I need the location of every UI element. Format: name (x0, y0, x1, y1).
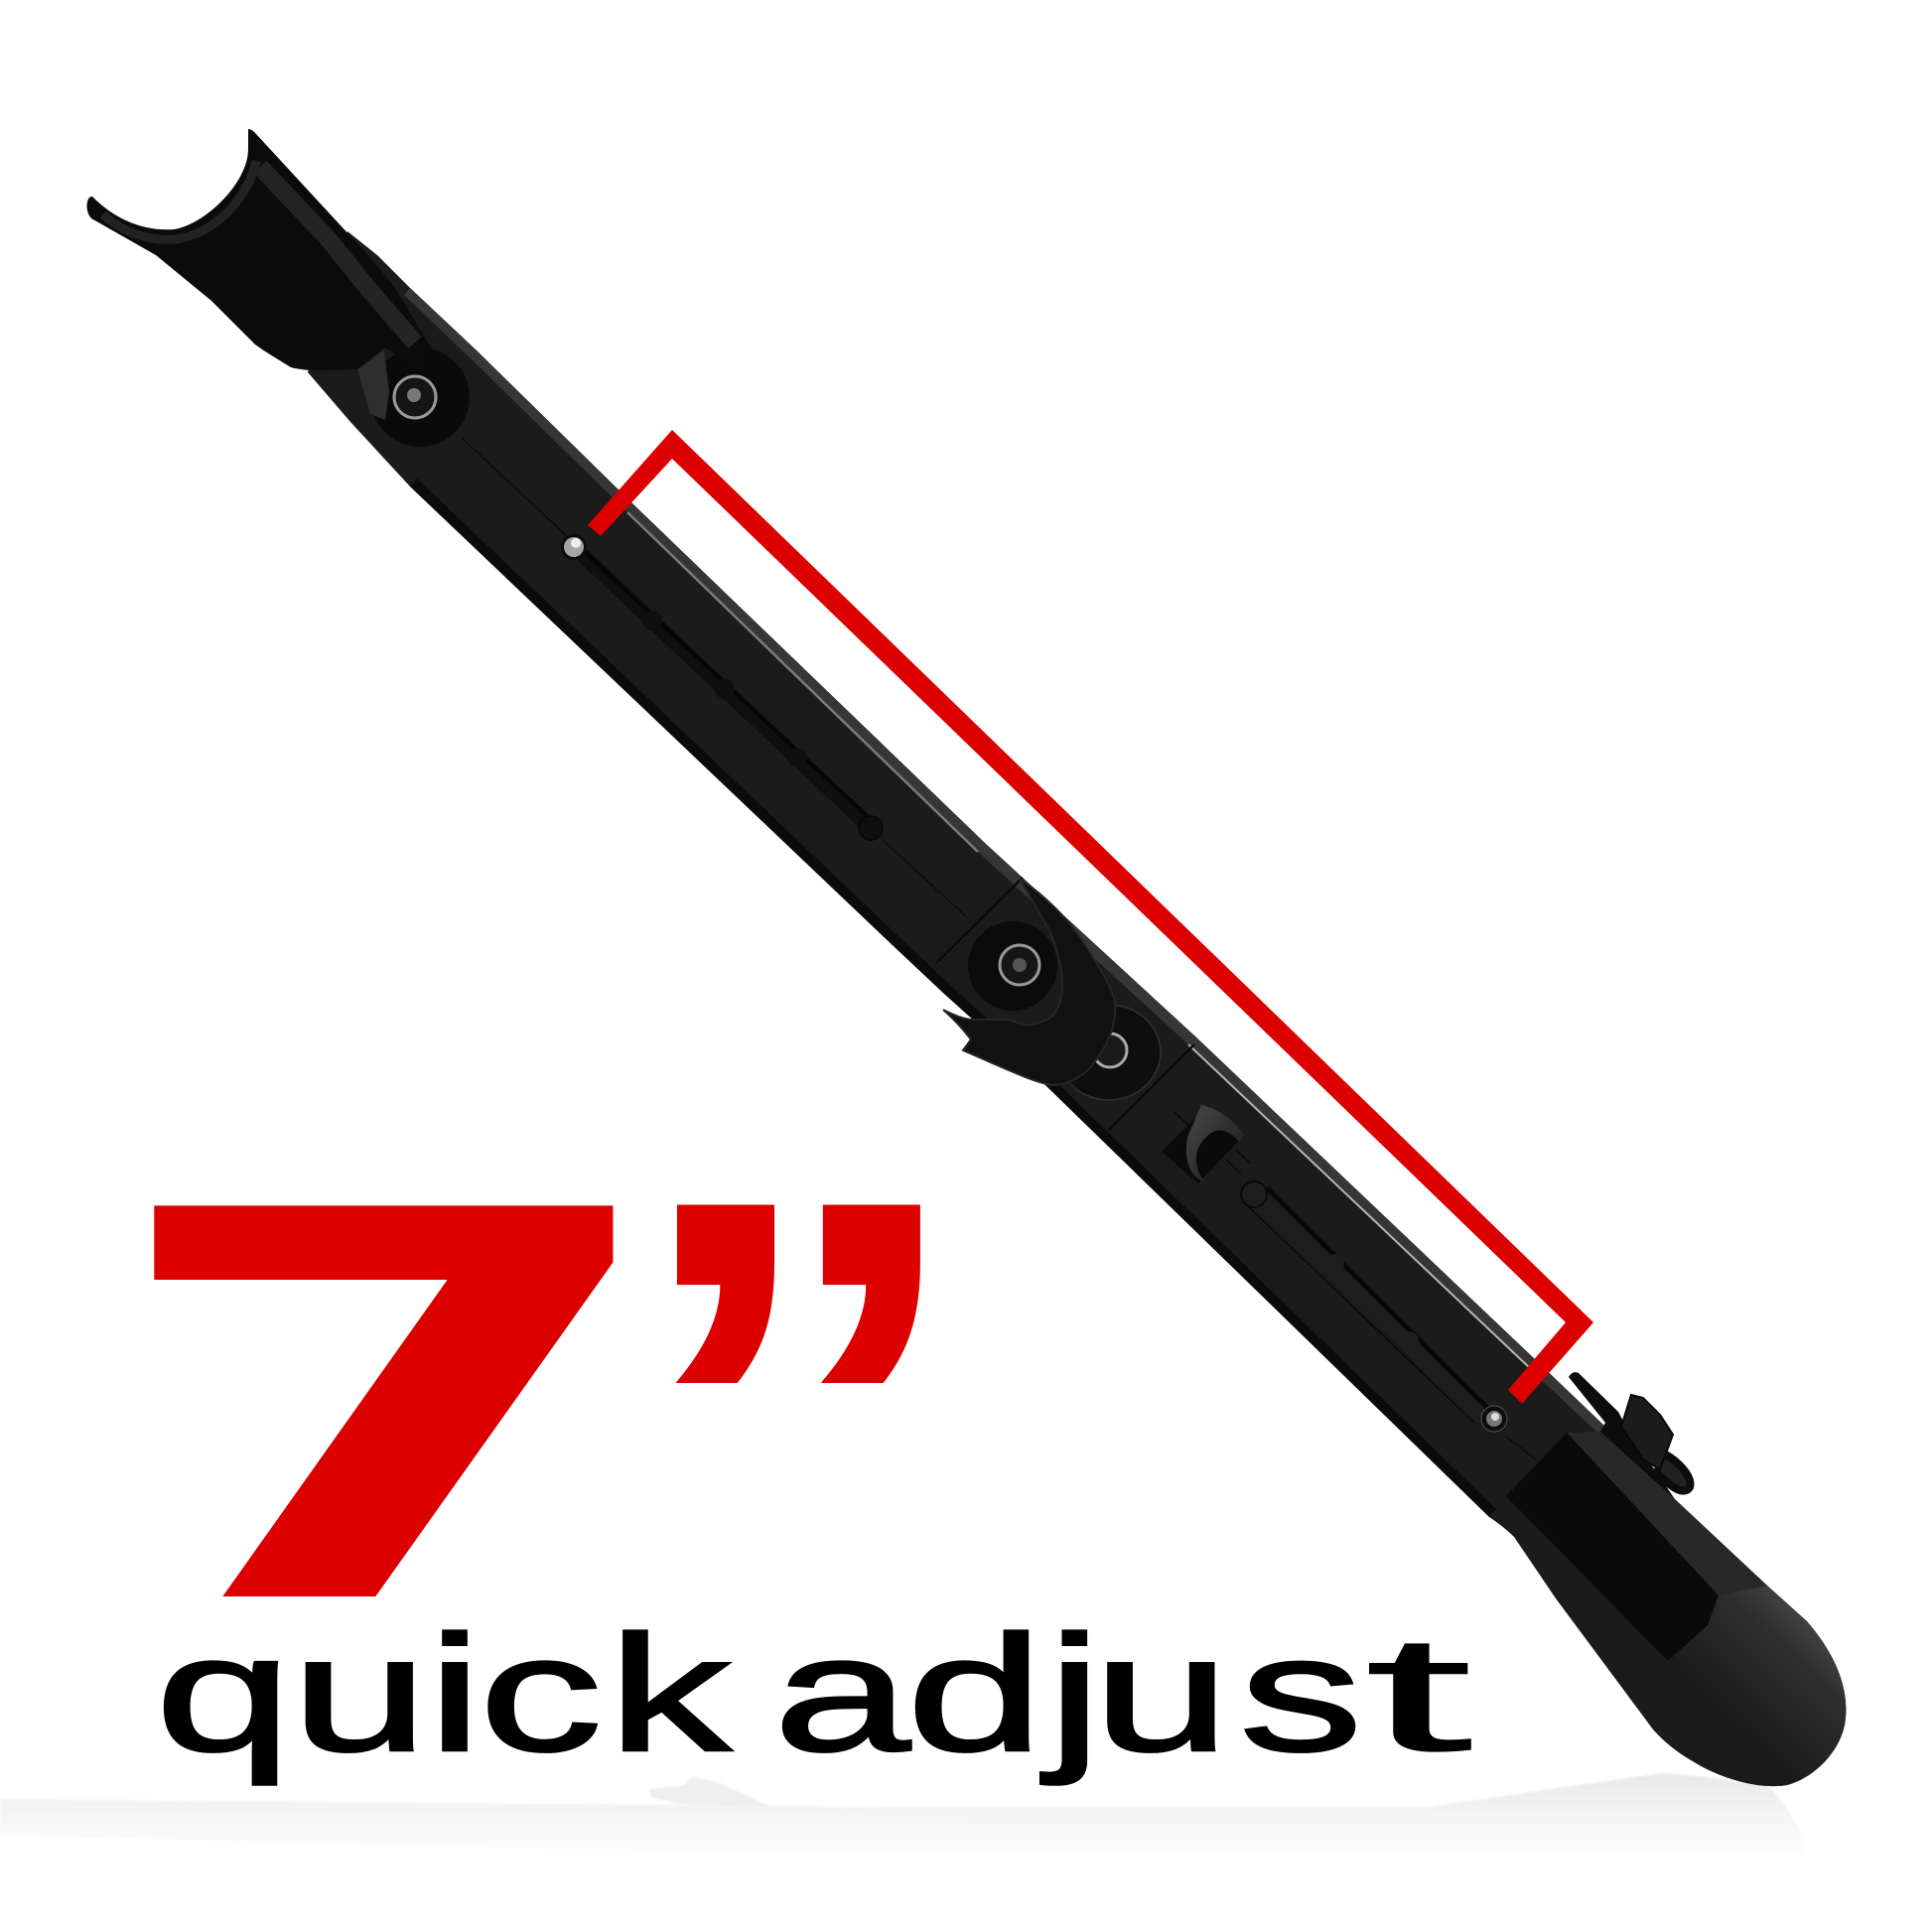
rail highlights (462, 438, 1536, 1459)
rod cup (87, 129, 432, 420)
centre folding rod clip (943, 879, 1115, 1085)
adjustment pin top (561, 534, 587, 560)
top pivot disc with screw (370, 347, 470, 447)
heading: 7 inch measurement: ” (624, 1067, 972, 1773)
rail and grip silhouette (308, 231, 1846, 1786)
small line clip (1162, 1105, 1251, 1183)
strap ring (1654, 1451, 1690, 1491)
centre pivot disc, lower (1057, 1005, 1161, 1100)
word: adjust: t (1364, 1600, 1473, 1785)
red dimension bracket (588, 430, 1593, 1404)
strap attachment bar (1569, 1372, 1675, 1499)
lower rail dark band (410, 479, 1496, 1517)
centre pivot disc, upper (968, 921, 1057, 1011)
gray bevel strip along top edge (404, 288, 1605, 1434)
grip end cap (1653, 1586, 1846, 1786)
grip dark panel (1506, 1433, 1719, 1661)
floor shadow (0, 1773, 1807, 1859)
upper adjustment slot (586, 553, 883, 840)
heading: 7 inch measurement (98, 1067, 972, 1773)
product: adjustable rod rail (87, 129, 1846, 1786)
adjustment pin bottom (1481, 1406, 1507, 1432)
word: quick: quick (155, 1600, 732, 1785)
heading: 7 inch measurement: 7 (98, 1099, 679, 1724)
grip side strip (1567, 1432, 1767, 1595)
lower adjustment slot (1241, 1181, 1489, 1424)
subheading: quick adjust (155, 1600, 1473, 1785)
strap knob (1621, 1395, 1673, 1469)
word: adjust: adjus (773, 1600, 1362, 1785)
